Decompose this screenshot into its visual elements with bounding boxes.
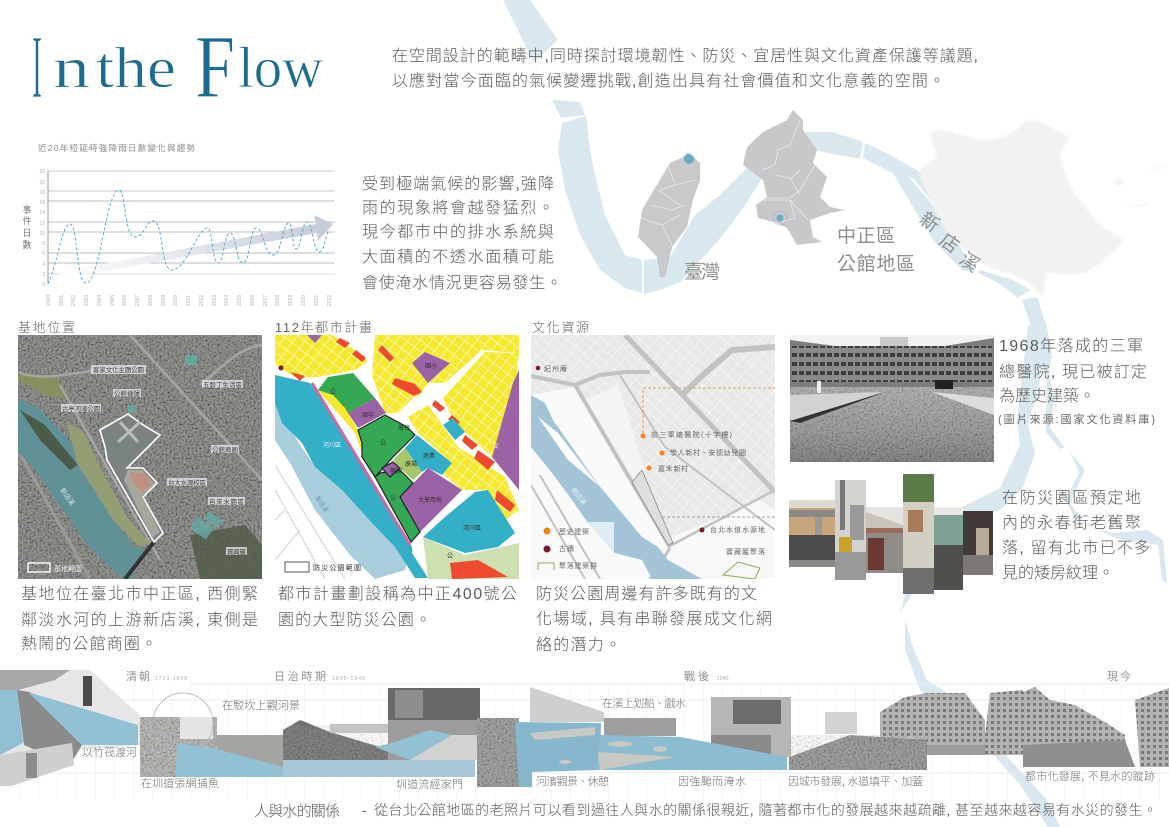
caption: 因強颱而淹水 [678, 775, 746, 788]
x axis year labels: 2017 [263, 295, 269, 306]
title [32, 18, 323, 117]
place labels [58, 365, 247, 556]
Yongchun street text: 落, 留有北市已不多 [1002, 539, 1150, 557]
x axis year labels: 2016 [250, 295, 256, 306]
y axis title [22, 204, 32, 250]
legend [285, 562, 309, 572]
label: district: 中正區 [837, 225, 895, 247]
x axis year labels: 2014 [224, 295, 230, 306]
x axis year labels [46, 295, 333, 306]
trend arrow [60, 215, 333, 279]
place labels: 學人新村、安德幼兒園 [670, 448, 746, 457]
landuse marks: 機關 [390, 467, 402, 475]
y axis labels: 14 [39, 210, 45, 216]
caption: site: 基地位在臺北市中正區, 西側緊 [21, 585, 258, 603]
x axis year labels: 2011 [186, 295, 192, 306]
x axis year labels: 2005 [110, 295, 116, 306]
photo strip: modern street [1023, 687, 1169, 767]
park [67, 423, 150, 547]
green and yellow park strip [318, 373, 375, 413]
label: Xindian creek: 店 [935, 229, 963, 258]
river [531, 395, 702, 579]
place labels: 前三軍總醫院(十字樓) [651, 430, 732, 439]
dashed data line [48, 190, 330, 284]
place labels: 古亭河濱公園 [62, 404, 100, 413]
label: Xindian creek: 溪 [955, 248, 983, 277]
hospital text: 總醫院, 現已被訂定 [999, 363, 1147, 381]
map: Taiwan [638, 152, 720, 283]
blue water [175, 743, 283, 777]
intro text: 以應對當今面臨的氣候變遷挑戰,創造出具有社會價值和文化意義的空間。 [392, 71, 945, 90]
water [515, 722, 601, 787]
x axis year labels: 2006 [122, 295, 128, 306]
location dot [684, 154, 694, 164]
rain paragraph: 大面積的不透水面積可能 [362, 248, 554, 266]
hospital text: 1968年落成的三軍 [999, 337, 1143, 355]
caption: 在圳道張網捕魚 [141, 777, 219, 790]
purple zones [307, 335, 519, 532]
x axis year labels: 2000 [46, 295, 52, 306]
dashed leaders [643, 388, 775, 433]
place labels: 寶藏巖聚落 [726, 547, 765, 556]
era label: Japanese rule [274, 669, 365, 683]
title: low [238, 35, 323, 100]
y axis labels: 22 [39, 169, 45, 175]
intro text [392, 47, 978, 90]
era label: present: 現今 [1107, 669, 1131, 683]
x axis year labels: 2009 [161, 295, 167, 306]
photo strip: embankment and house [283, 688, 480, 777]
era label: Japanese rule: 日治時期 [274, 669, 326, 683]
Yongchun street text: 在防災園區預定地 [1002, 489, 1141, 507]
panel: cultural resources map: 歷史建築 [559, 527, 589, 536]
river watercolour background [503, 0, 1167, 827]
bridge [125, 542, 154, 579]
era label: post-war [684, 669, 730, 683]
panel: cultural resources map [531, 335, 775, 579]
x axis year labels: 2020 [301, 295, 307, 306]
caption: plan: 園的大型防災公園。 [278, 611, 431, 629]
caption: culture: 絡的潛力。 [536, 636, 621, 654]
era label: Qing: 1723-1895 [155, 676, 187, 682]
chart title: 近20年短延時強降雨日數變化與趨勢 [38, 143, 195, 153]
y axis title: 件 [22, 215, 32, 226]
landuse marks: 國中 [362, 411, 374, 419]
label: Xindian creek: 新 [915, 208, 943, 237]
caption: 在駁坎上觀河景 [222, 699, 300, 712]
title: the [96, 35, 176, 100]
y axis labels: 0 [42, 282, 45, 288]
photo strip: Qing era [0, 670, 140, 787]
heritage points [640, 434, 664, 470]
photo strip: fishing [140, 693, 283, 777]
river [18, 398, 148, 579]
y axis labels: 18 [39, 190, 45, 196]
hospital text: 為歷史建築。 [999, 387, 1095, 405]
photo strip: boating [477, 687, 791, 787]
Yongchun street text: 內的永春街老舊聚 [1002, 514, 1141, 532]
legend [544, 528, 550, 534]
pale river [275, 403, 408, 579]
red blocks [290, 338, 515, 512]
bottom statement: 人與水的關係 [254, 802, 340, 820]
section heading: urban plan: 112年都市計畫 [275, 320, 372, 335]
landuse marks: 公 [390, 495, 396, 502]
panel: urban plan map: 新店溪 [313, 495, 330, 514]
place labels: 台大水源校區 [168, 478, 206, 487]
landuse marks: 商業 [423, 452, 435, 460]
era label: Qing: 清朝 [126, 670, 150, 683]
era label: Qing [126, 670, 187, 683]
site outline [632, 470, 673, 545]
caption: plan: 都市計畫劃設稱為中正400號公 [278, 585, 517, 603]
x axis year labels: 2003 [84, 295, 90, 306]
x axis year labels: 2013 [212, 295, 218, 306]
title: n [53, 35, 90, 100]
rain paragraph: 會使淹水情況更容易發生。 [362, 274, 562, 292]
place labels: 寶藏巖 [227, 547, 246, 556]
hospital text [998, 337, 1155, 426]
panel: aerial site map [18, 335, 262, 579]
landuse marks: 廣場 [405, 460, 417, 468]
photo strip: filled street [789, 690, 1023, 770]
rain paragraph: 雨的現象將會越發猛烈。 [362, 199, 554, 217]
rain paragraph: 受到極端氣候的影響,強降 [362, 175, 554, 193]
section heading: site: 基地位置 [18, 320, 75, 335]
place labels: 公館捷運 [114, 389, 140, 398]
era label: post-war: 1945- [717, 676, 730, 682]
landuse marks: 文 [493, 442, 499, 450]
caption: 都市化發展, 不見水的蹤跡 [1025, 769, 1155, 783]
caption: plan [278, 585, 517, 629]
label: 臺灣 [684, 261, 720, 283]
y axis title: 數 [22, 239, 32, 250]
streets lower left [275, 465, 345, 579]
timeline grid [0, 684, 1169, 800]
era label: post-war: 戰後 [684, 669, 709, 683]
legend [28, 563, 50, 572]
greenery outline [723, 562, 760, 579]
caption: 河濱觀景、休憩 [536, 774, 609, 788]
era label: Japanese rule: 1895-1945 [332, 676, 365, 682]
x axis year labels: 2007 [135, 295, 141, 306]
caption: site [21, 585, 258, 653]
Yongchun street text [1002, 489, 1150, 582]
landuse marks: 學校 [398, 424, 410, 432]
caption: 因城市發展, 水道填平、加蓋 [788, 775, 923, 788]
location dot [776, 214, 784, 222]
x axis year labels: 2022 [327, 295, 333, 306]
boats [530, 727, 675, 770]
disaster park boundary [358, 415, 420, 542]
south parcels [423, 490, 515, 553]
place labels: 紀州庵 [544, 364, 567, 373]
landuse marks: 公 [380, 440, 386, 447]
x axis year labels: 2018 [275, 295, 281, 306]
map: Taipei [743, 110, 845, 245]
y axis labels: 8 [42, 241, 45, 247]
bottom statement: 從台北公館地區的老照片可以看到過往人與水的關係很親近, 隨著都市化的發展越來越疏離, 甚至越來越容易有水災的發生。 [374, 802, 1157, 818]
vegetation patches [18, 375, 70, 400]
title: I [32, 18, 42, 117]
Yongchun street text: 見的矮房紋理。 [1002, 564, 1114, 582]
x axis year labels: 2010 [173, 295, 179, 306]
place labels [544, 364, 765, 556]
section heading: cultural: 文化資源 [532, 320, 589, 335]
caption: culture: 防災公園周邊有許多既有的文 [536, 585, 757, 603]
bottom statement: - [362, 802, 367, 818]
place labels: 五穀丁生活區 [203, 380, 242, 389]
landuse marks: 大學用地 [418, 496, 442, 504]
place labels: 嘉禾新村 [658, 464, 688, 473]
photo: military hospital [790, 335, 994, 462]
landuse marks [323, 362, 499, 560]
landuse marks: 國小 [425, 362, 437, 370]
place labels: 客家文化主題公園 [93, 365, 144, 374]
teal river park [275, 375, 428, 578]
place labels: 新店溪 [58, 486, 77, 508]
roads [18, 335, 262, 560]
y axis labels: 2 [42, 272, 45, 278]
caption: culture [536, 585, 772, 654]
place labels: 公館商圈 [212, 445, 238, 454]
y axis labels [39, 169, 45, 288]
caption: site: 鄰淡水河的上游新店溪, 東側是 [21, 611, 258, 629]
blue water [0, 690, 23, 755]
water [283, 760, 475, 777]
y axis title: 日 [22, 228, 32, 238]
place labels: 自來水園區 [209, 497, 244, 506]
x axis year labels: 2019 [288, 295, 294, 306]
hospital text: (圖片來源:國家文化資料庫) [998, 412, 1155, 426]
landuse marks: 河川區 [463, 524, 481, 532]
caption: site: 熱鬧的公館商圈。 [21, 635, 157, 653]
y axis labels: 12 [39, 221, 45, 227]
panel: urban plan map [275, 335, 519, 579]
panel: urban plan map: 防災公園範圍 [313, 563, 361, 572]
island [20, 410, 78, 470]
ink splash [920, 120, 1168, 297]
x axis year labels: 2021 [314, 295, 320, 306]
caption: 圳道流經家門 [396, 777, 463, 791]
title: F [195, 18, 235, 117]
label: district [837, 225, 915, 275]
landuse marks: 公 [447, 553, 453, 560]
caption: 在溪上划船、戲水 [602, 697, 686, 710]
panel: cultural resources map: 古蹟 [559, 544, 574, 553]
x axis year labels: 2008 [148, 295, 154, 306]
y axis title: 事 [22, 204, 32, 215]
gridlines [48, 171, 335, 284]
y axis labels: 6 [42, 251, 45, 257]
site boundary [100, 414, 163, 542]
yellow zones [275, 335, 519, 520]
place labels: 台北水道水源地 [710, 525, 765, 534]
landuse marks: 河川區 [323, 441, 341, 449]
panel: cultural resources map: 新店溪 [569, 486, 589, 507]
y axis labels: 4 [42, 262, 45, 268]
rain paragraph: 現今都市中的排水系統與 [362, 223, 554, 241]
panel: aerial site map: 基地範圍 [54, 564, 82, 573]
rain paragraph [362, 175, 562, 292]
photo collage: Yongchun street [789, 474, 993, 594]
label: Xindian creek [915, 208, 983, 277]
caption: 以竹筏渡河 [82, 745, 137, 759]
x axis year labels: 2015 [237, 295, 243, 306]
y axis labels: 16 [39, 200, 45, 206]
panel: cultural resources map: 聚落建築群 [559, 561, 597, 570]
intro text: 在空間設計的範疇中,同時探討環境韌性、防災、宜居性與文化資產保護等議題, [392, 47, 978, 65]
x axis year labels: 2004 [97, 295, 103, 306]
x axis year labels: 2002 [71, 295, 77, 306]
y axis labels: 20 [39, 180, 45, 186]
roads [531, 335, 775, 579]
label: district: 公館地區 [837, 253, 915, 275]
landuse marks: 公 [330, 389, 336, 396]
y axis labels: 10 [39, 231, 45, 237]
x axis year labels: 2001 [59, 295, 65, 306]
river island sliver [907, 175, 947, 222]
caption: culture: 化場域, 具有串聯發展成文化網 [536, 610, 772, 628]
line chart: rain days [22, 143, 335, 306]
x axis year labels: 2012 [199, 295, 205, 306]
pink levee [312, 383, 410, 545]
